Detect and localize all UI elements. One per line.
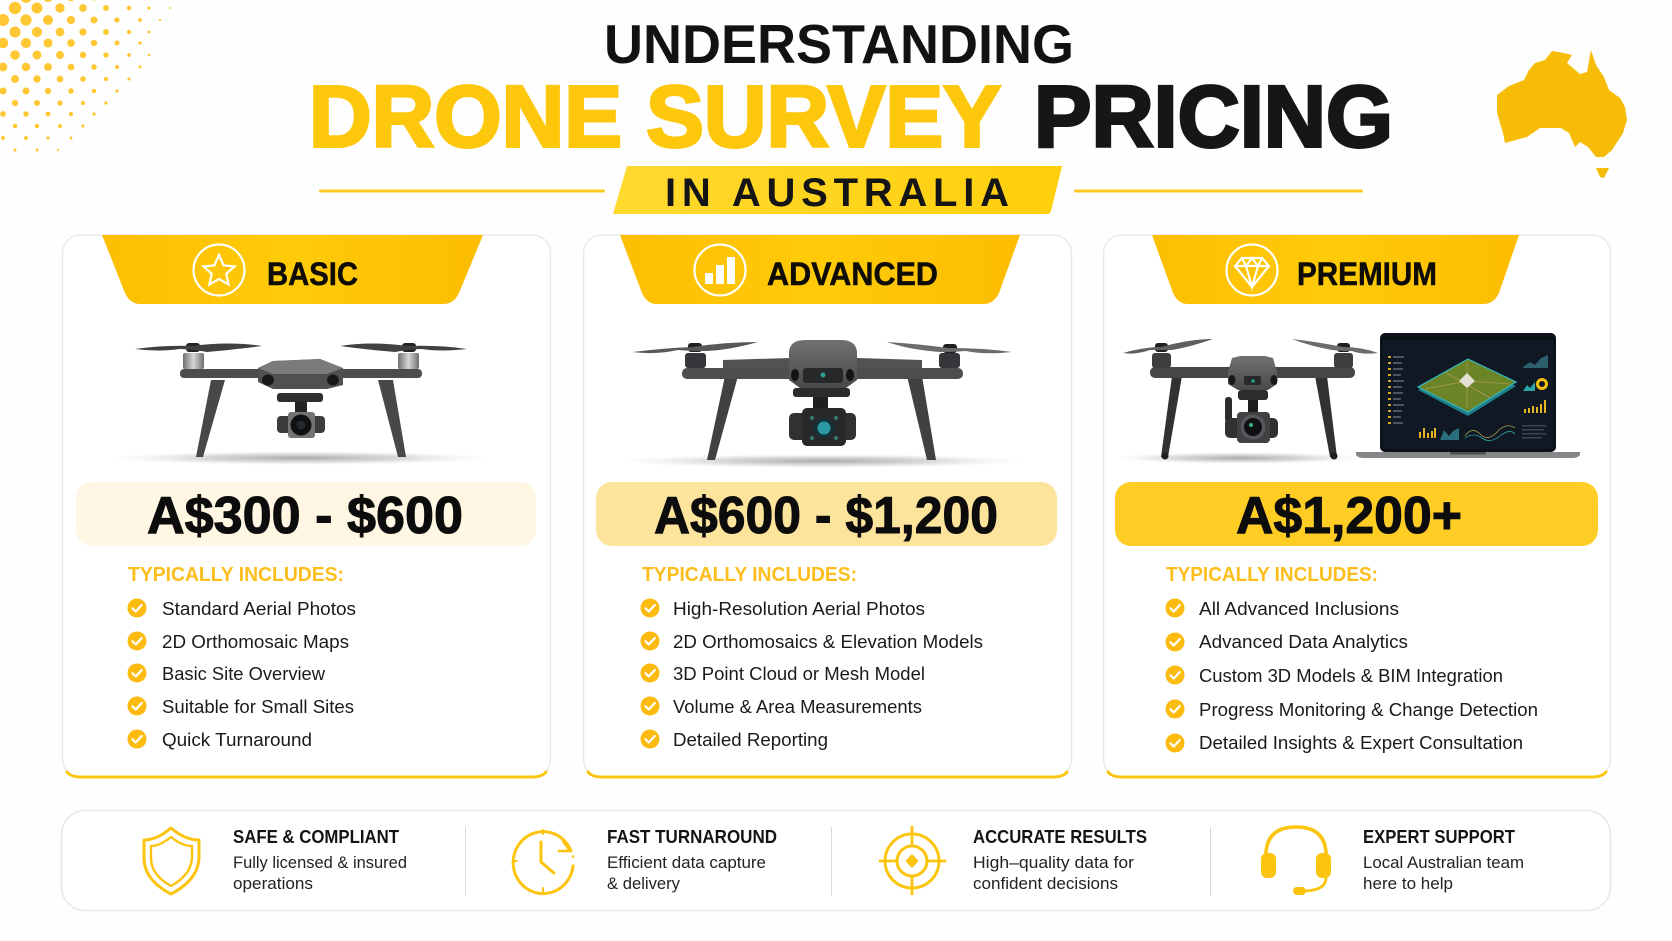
feature: Progress Monitoring & Change Detection bbox=[1199, 699, 1538, 720]
icon: shield bbox=[144, 828, 199, 894]
text: expert support bbox=[1363, 827, 1524, 893]
feature: Detailed Insights & Expert Consultation bbox=[1199, 732, 1523, 753]
decoration: halftone dots bbox=[0, 0, 171, 151]
text: expert support: here to help bbox=[1363, 875, 1453, 893]
icon: headset bbox=[1261, 827, 1331, 895]
image: premium drone bbox=[1115, 339, 1378, 464]
footer strip: assurances bbox=[62, 810, 1610, 910]
feature: Volume & Area Measurements bbox=[673, 696, 922, 717]
feature: 2D Orthomosaic Maps bbox=[162, 631, 349, 652]
benefit: safe and compliant bbox=[144, 827, 407, 894]
panel: premium bbox=[1104, 235, 1610, 777]
banner: basic bbox=[102, 235, 483, 304]
text: safe and compliant: Fully licensed & insured bbox=[233, 854, 407, 872]
subtitle ribbon: in australia: IN AUSTRALIA bbox=[665, 171, 1009, 215]
benefit: accurate results bbox=[880, 827, 1147, 894]
text: accurate results: ACCURATE RESULTS bbox=[973, 827, 1147, 847]
feature: Advanced Data Analytics bbox=[1199, 631, 1408, 652]
text: accurate results: High–quality data for bbox=[973, 854, 1135, 872]
icon: diamond bbox=[1226, 244, 1278, 296]
feature: Detailed Reporting bbox=[673, 729, 828, 750]
banner: premium bbox=[1152, 235, 1519, 304]
tier name: advanced: ADVANCED bbox=[767, 256, 938, 292]
image: advanced drone bbox=[618, 340, 1028, 468]
text: fast turnaround bbox=[607, 827, 777, 893]
text: fast turnaround: Efficient data capture bbox=[607, 854, 766, 872]
title line: pricing: PRICING bbox=[1034, 68, 1393, 166]
banner: advanced bbox=[620, 235, 1020, 304]
feature: 2D Orthomosaics & Elevation Models bbox=[673, 631, 983, 652]
title line: understanding: UNDERSTANDING bbox=[604, 13, 1074, 75]
feature: Standard Aerial Photos bbox=[162, 598, 356, 619]
panel: basic bbox=[62, 235, 550, 777]
feature: High-Resolution Aerial Photos bbox=[673, 598, 925, 619]
feature: Basic Site Overview bbox=[162, 663, 326, 684]
heading: typically includes premium: TYPICALLY INCLUDES: bbox=[1166, 564, 1378, 586]
image: laptop with survey dashboard bbox=[1356, 333, 1580, 458]
subtitle ribbon: in australia bbox=[319, 166, 1363, 215]
title line: drone survey: DRONE SURVEY bbox=[309, 68, 1001, 166]
price: basic: A$300 - $600 bbox=[147, 487, 463, 545]
price: advanced: A$600 - $1,200 bbox=[654, 487, 998, 545]
text: accurate results bbox=[973, 827, 1147, 893]
panel: advanced bbox=[584, 235, 1072, 777]
feature list: premium bbox=[1166, 598, 1538, 753]
price: basic bbox=[76, 482, 536, 546]
text: fast turnaround: & delivery bbox=[607, 875, 681, 893]
icon: target bbox=[880, 827, 945, 894]
feature: Quick Turnaround bbox=[162, 729, 312, 750]
text: safe and compliant bbox=[233, 827, 407, 893]
laptop base bbox=[1356, 452, 1580, 458]
text: accurate results: confident decisions bbox=[973, 875, 1118, 893]
heading: typically includes advanced: TYPICALLY INCLUDES: bbox=[642, 564, 857, 586]
price: premium: A$1,200+ bbox=[1236, 487, 1462, 545]
text: expert support: Local Australian team bbox=[1363, 854, 1524, 872]
tier name: basic: BASIC bbox=[267, 256, 358, 292]
text: safe and compliant: operations bbox=[233, 875, 313, 893]
feature: Suitable for Small Sites bbox=[162, 696, 354, 717]
price: premium bbox=[1115, 482, 1598, 546]
title bbox=[309, 13, 1393, 166]
feature: All Advanced Inclusions bbox=[1199, 598, 1399, 619]
text: expert support: EXPERT SUPPORT bbox=[1363, 827, 1515, 847]
feature list: advanced bbox=[640, 598, 983, 750]
feature list: basic bbox=[128, 598, 356, 750]
icon: map of australia bbox=[1497, 50, 1627, 178]
icon: star bbox=[194, 244, 244, 296]
text: safe and compliant: SAFE & COMPLIANT bbox=[233, 827, 399, 847]
icon: bar chart bbox=[694, 244, 746, 296]
heading: typically includes basic: TYPICALLY INCLUDES: bbox=[128, 564, 344, 586]
feature: Custom 3D Models & BIM Integration bbox=[1199, 665, 1503, 686]
icon: clock bbox=[513, 830, 573, 894]
side charts bbox=[1523, 355, 1548, 368]
sidebar bbox=[1388, 356, 1391, 424]
text: fast turnaround: FAST TURNAROUND bbox=[607, 827, 777, 847]
benefit: expert support bbox=[1261, 827, 1524, 895]
tier name: premium: PREMIUM bbox=[1297, 256, 1437, 292]
feature: 3D Point Cloud or Mesh Model bbox=[673, 663, 925, 684]
image: basic drone bbox=[110, 343, 490, 465]
map bbox=[1418, 362, 1516, 416]
benefit: fast turnaround bbox=[513, 827, 777, 894]
